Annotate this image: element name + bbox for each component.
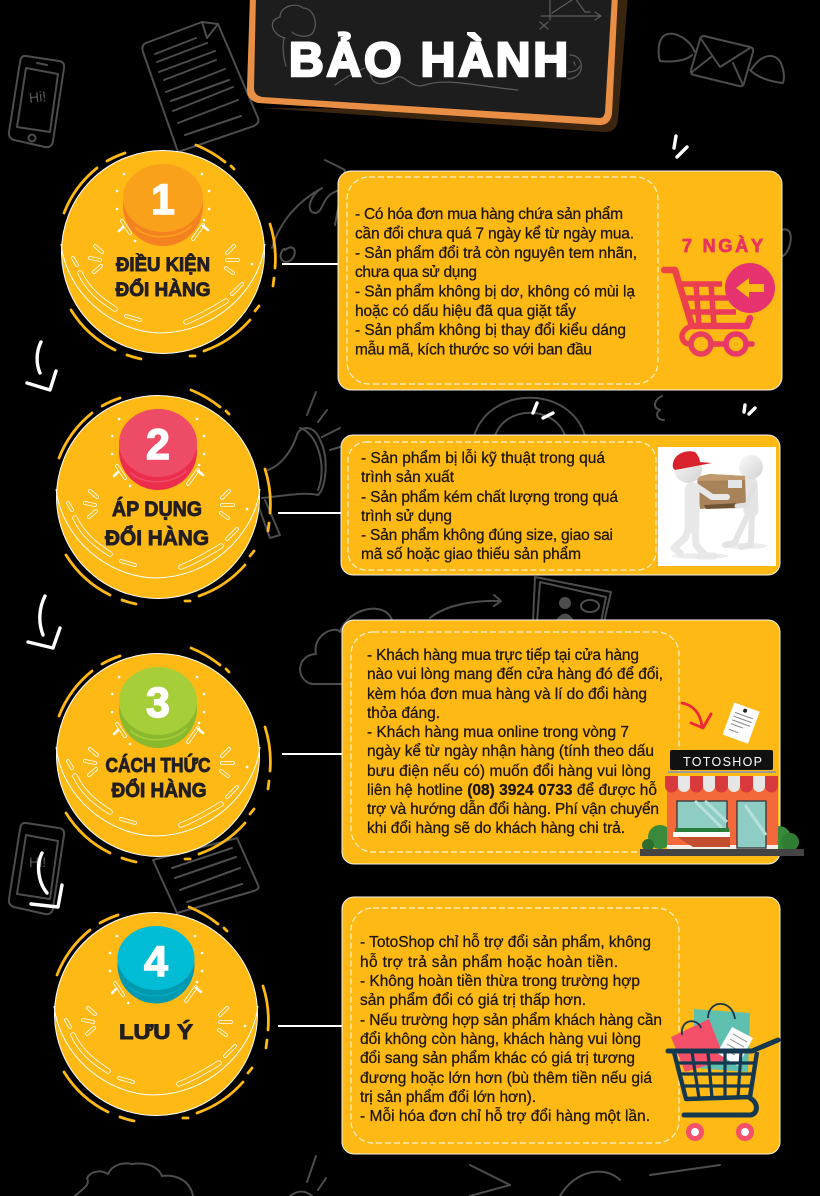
panel: notes	[342, 897, 780, 1154]
how to text: liên hệ hotline (08) 3924 0733 để được hỗ	[367, 782, 657, 799]
conditions text	[355, 206, 637, 358]
notes text	[360, 934, 662, 1125]
image: delivery figures	[658, 447, 776, 566]
applicable text	[361, 450, 618, 563]
arrow: step two to three	[28, 596, 60, 648]
label one: ĐIỀU KIỆN	[116, 254, 210, 276]
notes text: đổi sang sản phẩm khác có giá trị tương	[360, 1050, 635, 1067]
notes text: sản phẩm đổi có giá trị thấp hơn.	[360, 992, 586, 1009]
label three	[106, 753, 210, 802]
applicable text: - Sản phẩm bị lỗi kỹ thuật trong quá	[361, 450, 605, 467]
applicable text: - Sản phẩm không đúng size, giao sai	[361, 527, 613, 544]
how to text: ngày kể từ ngày nhận hàng (tính theo dấu	[367, 743, 654, 760]
doodle: circle arcs between panels	[474, 396, 664, 436]
left figure	[674, 486, 727, 556]
title text: BẢO HÀNH	[289, 32, 568, 87]
button two	[119, 409, 197, 490]
conditions text: hoặc có dấu hiệu đã qua giặt tẩy	[355, 303, 576, 320]
button three	[119, 667, 197, 748]
panel: applicable	[341, 435, 780, 575]
button one	[123, 164, 203, 246]
how to text: khi đổi hàng sẽ do khách hàng chi trả.	[367, 820, 625, 837]
panel: conditions	[338, 171, 782, 390]
notes text: đương hoặc lớn hơn (bù thêm tiền nếu giá	[360, 1070, 652, 1087]
button two: 2	[146, 421, 170, 469]
how to text: bưu điện nếu có) muốn đổi hàng vui lòng	[367, 763, 651, 780]
conditions text: - Sản phẩm không bị dơ, không có mùi lạ	[355, 284, 635, 300]
notes text: - Nếu trường hợp sản phẩm khách hàng cần	[360, 1012, 662, 1029]
button three: 3	[146, 679, 170, 727]
notes text: đổi không còn hàng, khách hàng vui lòng	[360, 1031, 641, 1048]
connector lines	[278, 264, 343, 1026]
notes text: - Mỗi hóa đơn chỉ hỗ trợ đổi hàng một lần.	[360, 1108, 650, 1125]
conditions text: - Có hóa đơn mua hàng chứa sản phẩm	[355, 206, 623, 223]
button one: 1	[151, 176, 175, 224]
how to text: nào vui lòng mang đến cửa hàng đó để đổi,	[367, 666, 663, 683]
applicable text: trình sử dụng	[361, 508, 452, 525]
conditions text: cần đổi chưa quá 7 ngày kể từ ngày mua.	[355, 226, 634, 242]
label two: ĐỔI HÀNG	[105, 526, 209, 550]
label three: ĐỔI HÀNG	[112, 778, 206, 802]
how to text: trợ và hướng dẫn đổi hàng. Phí vận chuyển	[367, 801, 659, 818]
how to text: - Khách hàng mua online trong vòng 7	[367, 724, 629, 741]
button four	[118, 926, 194, 1004]
notes text: hỗ trợ trả sản phẩm hoặc hoàn tiền.	[360, 954, 618, 971]
step two circle	[56, 390, 270, 604]
label two	[105, 498, 209, 550]
applicable text: - Sản phẩm kém chất lượng trong quá	[361, 489, 618, 506]
arrow: step three to four	[31, 853, 62, 907]
doodle: phone top left: Hi!	[28, 88, 47, 106]
label two: ÁP DỤNG	[112, 498, 202, 521]
icon: shopping cart with bags	[668, 1004, 778, 1138]
blackboard title	[247, 0, 628, 132]
label four: LƯU Ý	[119, 1020, 193, 1044]
panel: how to exchange	[342, 620, 804, 864]
applicable text: trình sản xuất	[361, 469, 455, 486]
doodle: flying envelope	[659, 34, 784, 86]
conditions text: mẫu mã, kích thước so với ban đầu	[355, 342, 592, 358]
box	[697, 474, 746, 509]
conditions text: - Sản phẩm đổi trả còn nguyên tem nhãn,	[355, 245, 637, 262]
how to text: thỏa đáng.	[367, 705, 440, 722]
label one	[116, 254, 210, 301]
applicable text: mã số hoặc giao thiếu sản phẩm	[361, 546, 581, 563]
shop sign	[670, 750, 773, 770]
doodle: bottom margin	[75, 1156, 720, 1196]
how to text	[367, 647, 663, 837]
white ticks	[533, 136, 755, 418]
notes text: trị sản phẩm đổi lớn hơn).	[360, 1089, 536, 1106]
step three circle	[56, 648, 270, 862]
button four: 4	[144, 938, 168, 986]
icon: toto shop storefront	[640, 750, 804, 856]
right figure	[725, 484, 752, 547]
awning	[665, 776, 778, 792]
doodle: phone top left	[9, 56, 64, 147]
doodle: megaphone	[258, 392, 340, 538]
shop sign: TOTOSHOP	[683, 755, 762, 769]
doodle: photo frame and cloud	[300, 577, 611, 684]
notes text: - Không hoàn tiền thừa trong trường hợp	[360, 973, 640, 990]
conditions text: - Sản phẩm không bị thay đổi kiểu dáng	[355, 322, 626, 339]
icon: receipt	[723, 703, 760, 744]
notes text: - TotoShop chỉ hỗ trợ đổi sản phẩm, không	[360, 934, 651, 951]
doodle: document top	[142, 22, 258, 152]
seven day label: 7 NGÀY	[682, 235, 763, 256]
label one: ĐỔI HÀNG	[116, 279, 210, 301]
arrow: step one to two	[27, 342, 56, 390]
how to text: - Khách hàng mua trực tiếp tại cửa hàng	[367, 647, 639, 664]
conditions text: chưa qua sử dụng	[355, 264, 477, 281]
how to text: kèm hóa đơn mua hàng và lí do đổi hàng	[367, 686, 647, 703]
arrow: red to shop	[682, 703, 711, 728]
doodle: curl behind panel one	[272, 160, 791, 262]
doodle: doodles at lower left	[9, 823, 258, 914]
label three: CÁCH THỨC	[106, 753, 210, 777]
doodle: doodles at lower left: Hi!	[29, 854, 46, 870]
chalk doodles	[272, 0, 601, 90]
step one circle	[61, 145, 275, 359]
icon: return cart	[664, 263, 775, 354]
step four circle	[54, 907, 268, 1121]
